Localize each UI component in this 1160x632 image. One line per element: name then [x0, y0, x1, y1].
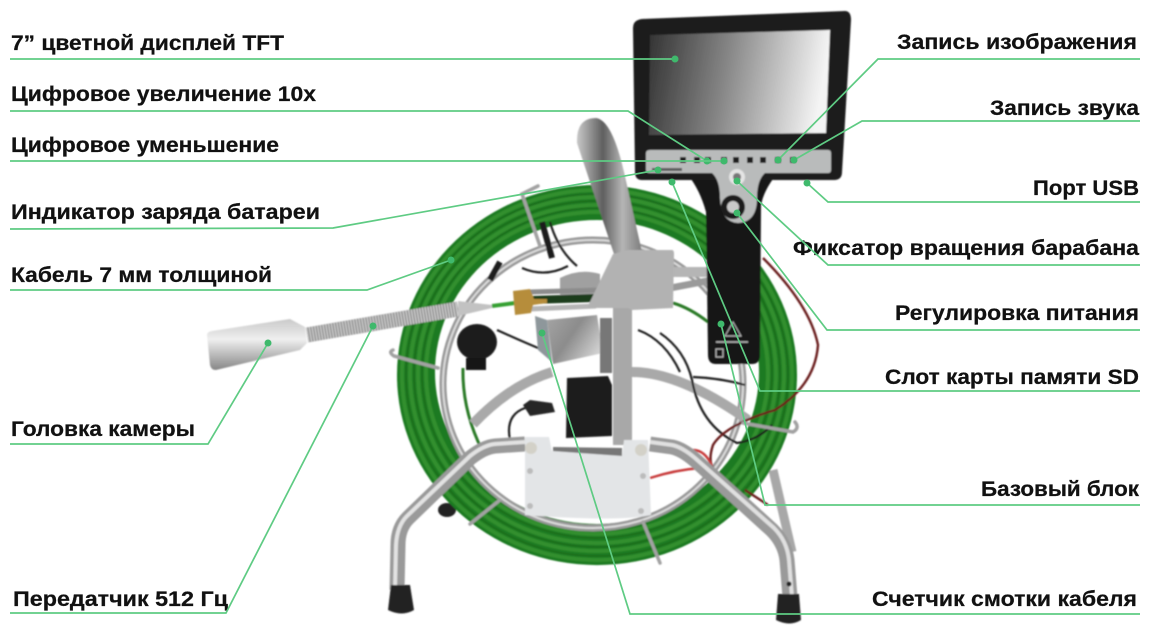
- callout: drum rotation lock: [734, 178, 1140, 265]
- spokes: [473, 372, 748, 424]
- rails to connector: [530, 272, 712, 309]
- inner loose green cable: [463, 303, 708, 450]
- panel buttons: [652, 157, 796, 171]
- gray cover plate: [547, 315, 603, 364]
- callout: SD card slot: [668, 178, 1140, 391]
- callout: 7-inch display: 7” цветной дисплей TFT: [11, 32, 284, 55]
- callout: 512 Hz transmitter: [10, 322, 376, 613]
- callout: battery indicator: [10, 166, 662, 229]
- screen: [649, 30, 830, 135]
- black wires: [490, 222, 772, 443]
- monitor handle: [688, 175, 776, 364]
- power knob: [729, 169, 745, 185]
- motor cylinder: [560, 272, 600, 295]
- monitor body: [633, 11, 851, 180]
- callout: base unit: [718, 320, 1140, 505]
- base mounting plate: [525, 437, 651, 518]
- top carrying handle tube: [577, 118, 642, 254]
- callout: 7-inch display: [10, 32, 678, 62]
- callout: cable counter: Счетчик смотки кабеля: [872, 588, 1137, 611]
- cable reel: green coil: [397, 185, 797, 565]
- callout: digital zoom in: Цифровое увеличение 10х: [11, 83, 316, 106]
- base frame tubes: [395, 442, 792, 597]
- silver control panel: [646, 150, 831, 223]
- callout: image recording: Запись изображения: [897, 31, 1137, 54]
- rubber feet: [388, 582, 801, 624]
- callout: digital zoom in: [10, 83, 710, 164]
- cable ferrule: [458, 301, 492, 316]
- callout: base unit: Базовый блок: [981, 478, 1140, 501]
- callout: battery indicator: Индикатор заряда батареи: [11, 201, 320, 224]
- callout: digital zoom out: Цифровое уменьшение: [11, 134, 279, 157]
- black motor box: [566, 376, 612, 438]
- plate bolts: [525, 442, 647, 514]
- callout: 512 Hz transmitter: Передатчик 512 Гц: [13, 588, 228, 611]
- callout: image recording: [774, 31, 1140, 164]
- brass connector: [513, 289, 547, 315]
- callout: camera head: [10, 340, 272, 444]
- gray bracket: [587, 250, 674, 310]
- black wheel: [457, 324, 497, 370]
- spring cable: [307, 309, 458, 335]
- callout: digital zoom out: [10, 134, 728, 164]
- steel inner ring: [443, 240, 743, 528]
- callout: camera head: Головка камеры: [11, 418, 195, 441]
- camera head: [207, 319, 307, 370]
- back legs and back foot: [438, 470, 792, 552]
- central vertical post: [613, 300, 632, 445]
- callout: sound recording: Запись звука: [990, 97, 1139, 120]
- callout: 7 mm cable: Кабель 7 мм толщиной: [11, 264, 272, 287]
- mechanism detail: [535, 316, 552, 362]
- callout: power control: [734, 210, 1140, 330]
- drum lock knob: [721, 195, 745, 219]
- product photo: inspection camera on reel: [207, 11, 851, 624]
- callout: SD card slot: Слот карты памяти SD: [885, 366, 1139, 389]
- reel clips: [391, 186, 797, 563]
- callout: sound recording: [790, 97, 1140, 164]
- handle warning label: [716, 322, 748, 357]
- callout: USB port: [804, 177, 1140, 202]
- callout: cable counter: [538, 330, 1140, 614]
- red wires: [650, 258, 818, 505]
- callout: USB port: Порт USB: [1033, 177, 1139, 200]
- green cable stub: [492, 303, 515, 306]
- callout: 7 mm cable: [10, 256, 454, 290]
- callout: power control: Регулировка питания: [895, 302, 1139, 325]
- callout: drum rotation lock: Фиксатор вращения барабана: [793, 237, 1139, 260]
- USB plug: [523, 400, 555, 416]
